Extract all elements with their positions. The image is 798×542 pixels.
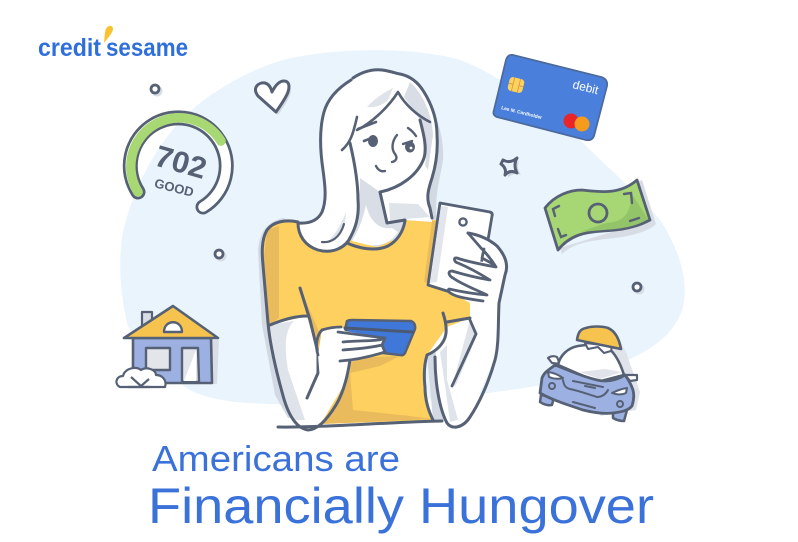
bush	[116, 368, 166, 387]
face outline	[380, 120, 425, 223]
nose	[392, 135, 397, 162]
hair	[298, 70, 437, 252]
house	[116, 306, 219, 387]
burger hat	[585, 343, 612, 353]
bill shadow	[560, 180, 656, 254]
debit card	[493, 55, 607, 140]
hair strand	[322, 224, 344, 242]
grille	[563, 380, 608, 408]
icon: heart	[256, 81, 291, 115]
held card	[345, 320, 415, 355]
neck shadow	[350, 178, 405, 247]
card body	[493, 55, 607, 140]
bill corners	[553, 193, 639, 237]
roof	[124, 306, 218, 338]
face	[350, 92, 425, 192]
headlights	[548, 372, 563, 379]
bill fold shade	[580, 194, 648, 232]
front wheels	[540, 395, 554, 405]
logo: sesame	[106, 34, 188, 62]
cardholder name: Lee M. Cardholder	[501, 105, 543, 121]
mouth	[376, 166, 385, 171]
logo	[38, 26, 188, 62]
right hand fingers	[448, 233, 496, 301]
eyebrow	[403, 128, 416, 144]
gauge green arc	[131, 118, 221, 192]
collar	[347, 221, 405, 249]
window	[146, 348, 170, 370]
car	[540, 326, 640, 421]
mastercard logo	[564, 114, 578, 128]
eyes	[364, 137, 374, 141]
hair outline	[353, 70, 437, 218]
small circle right	[633, 283, 644, 294]
hair shading	[367, 88, 393, 107]
shirt shading	[263, 226, 279, 325]
right arm outline	[435, 233, 507, 427]
money bill	[545, 180, 656, 254]
car shadow	[600, 338, 640, 416]
fog lights	[549, 383, 555, 389]
left arm	[269, 316, 382, 430]
score label: GOOD	[153, 176, 195, 200]
side mirrors	[548, 356, 560, 364]
title line one: Americans are	[152, 438, 400, 479]
woman	[258, 70, 507, 430]
shirt outline	[262, 221, 298, 323]
sparkle	[501, 158, 521, 178]
bill paper	[545, 180, 650, 250]
car body	[540, 365, 634, 413]
phone	[428, 203, 492, 300]
credit score gauge	[130, 118, 226, 207]
right arm	[427, 300, 499, 427]
small circle left	[215, 250, 226, 262]
shirt	[262, 219, 470, 424]
small circle top left	[151, 85, 162, 96]
logo drop	[104, 26, 113, 43]
right hand	[448, 233, 507, 303]
door	[182, 348, 199, 382]
title line two: Financially Hungover	[148, 478, 654, 534]
logo text: credit	[38, 34, 102, 62]
house body	[133, 338, 212, 383]
card chip	[507, 76, 525, 94]
body shadow	[258, 218, 310, 418]
score number: 702	[151, 140, 210, 186]
card type: debit	[571, 77, 601, 97]
fringe	[342, 92, 430, 150]
left hand	[318, 327, 385, 400]
phone camera	[459, 218, 467, 226]
background blob	[120, 50, 685, 405]
bill centre circle	[589, 204, 607, 222]
card stripe	[345, 328, 413, 332]
ground shadow	[167, 340, 219, 384]
gauge track	[130, 118, 226, 207]
chimney	[142, 312, 152, 332]
windshield	[558, 345, 624, 382]
hair shadow	[400, 78, 443, 225]
dormer	[164, 322, 182, 332]
